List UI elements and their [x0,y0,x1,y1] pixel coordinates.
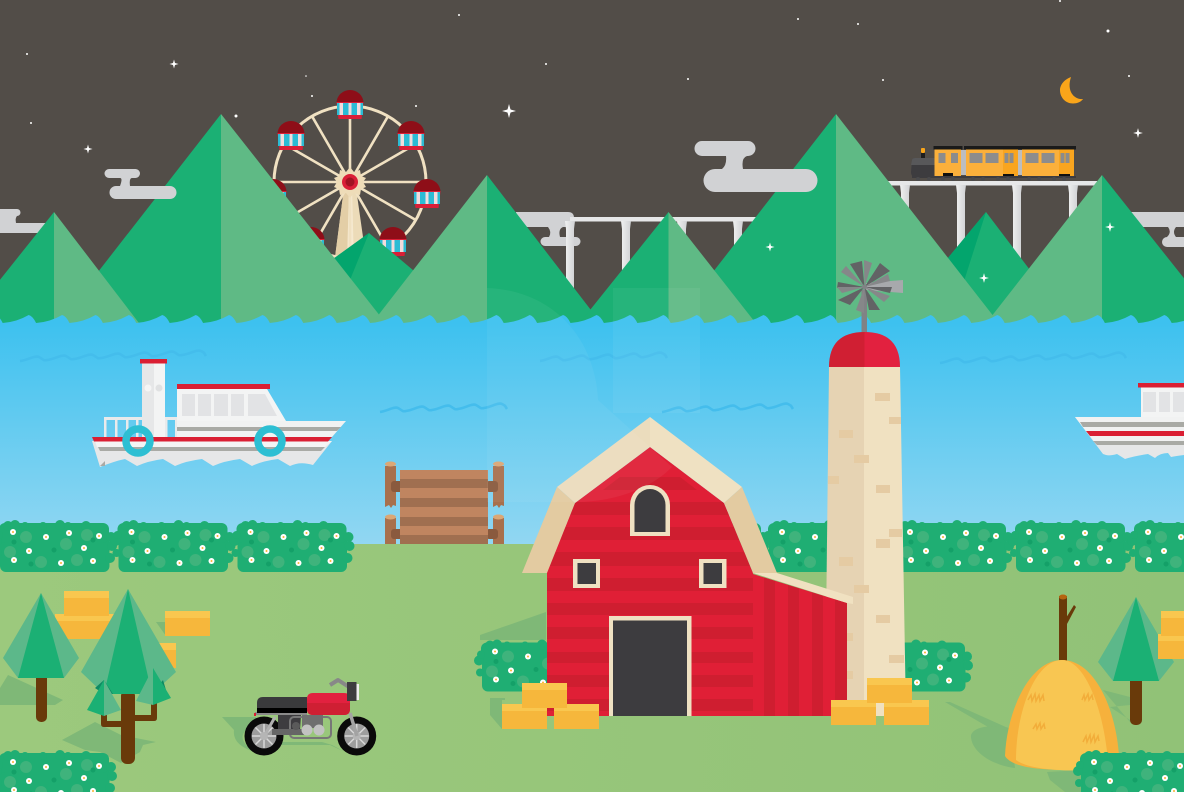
barn square window left [573,559,600,588]
mountain 6 [973,175,1184,340]
hedge row far bushes [0,520,1184,572]
tree 2 [81,589,176,764]
cloud: far left [0,209,50,233]
tower [334,188,367,265]
translucent light overlay [487,288,700,502]
cabin [1138,383,1184,417]
tree 3 [1098,597,1174,725]
haystack body [1005,660,1119,770]
tree 2 crown [81,589,176,694]
motorcycle [244,680,376,756]
mountain 5 [660,114,1012,340]
silo dome [829,332,864,367]
windmill [837,260,903,340]
tree 2 trunk and branches [101,690,157,764]
lake water [0,315,1184,560]
cabin [177,384,286,421]
bridge: upper section [885,181,1097,285]
pier posts [385,462,504,546]
foreground bush right [1073,750,1184,792]
rear wheel [244,716,284,756]
barn door [609,616,692,716]
barn wall stripes [547,477,753,711]
grass field [0,544,1184,792]
silo body [825,367,864,716]
handlebar and headlight [330,680,359,701]
night sky [0,0,1184,330]
barn upper roof [650,417,742,503]
foreground bush left [0,750,117,792]
moon [1060,77,1083,104]
wooden pier [385,462,504,546]
life rings [126,429,282,453]
tree 2 crown shadows [95,680,166,694]
small right branch crown [136,668,171,705]
steamboat left [92,359,346,467]
wheels [912,176,1076,181]
cloud: far right [1125,212,1184,247]
small left branch crown [87,680,121,716]
hay bales far right [1158,611,1184,659]
pier deck [400,470,488,545]
pier cross beams [391,481,498,539]
back mountain: center-left [221,233,496,340]
barn lower roof [522,487,575,573]
hull [1075,417,1184,459]
mountain 4 [566,212,769,340]
railing [104,417,178,437]
rim and spokes [274,106,426,258]
seat [257,697,307,713]
bridge: lower section [564,217,765,321]
hay tufts [1028,694,1099,742]
ferris wheel [260,90,440,265]
water ripples [20,351,1126,412]
cabins [260,90,440,256]
barn side shed [753,573,853,716]
mountain 3 [359,175,614,340]
fuel tank [307,693,350,715]
back mountain: center-right [880,212,1083,340]
funnel [140,359,167,437]
stars [26,0,1143,299]
locomotive [911,148,935,177]
hub [334,167,366,198]
cloud: center [695,141,818,192]
barn front wall [547,447,753,716]
train [911,146,1076,181]
mountain stars [765,222,1115,283]
windmill blades [837,260,892,313]
haystack [1005,594,1119,770]
frame and engine [254,712,357,738]
mountain 1 [0,212,152,340]
mid bushes beside barn and silo [474,640,973,692]
silo [825,332,906,716]
barn [522,417,853,716]
tree 1 [3,593,79,722]
silo bricks [828,393,904,679]
cloud: upper left [105,169,176,199]
barn square window right [699,559,726,588]
haystack pole [1059,594,1076,666]
hay bales left of barn [502,683,599,729]
carriages [934,146,1076,176]
hay bales far left [55,591,210,668]
front wheel [337,716,376,756]
mountain 2 [45,114,399,340]
hull [92,421,346,467]
windmill pole [862,290,867,340]
hay bales right of barn [831,678,929,725]
ground shadows [0,612,1130,792]
barn arched window [630,485,670,536]
cloud: behind bridge left [516,212,580,246]
steamboat right [1075,383,1184,459]
windmill tail [866,280,903,293]
